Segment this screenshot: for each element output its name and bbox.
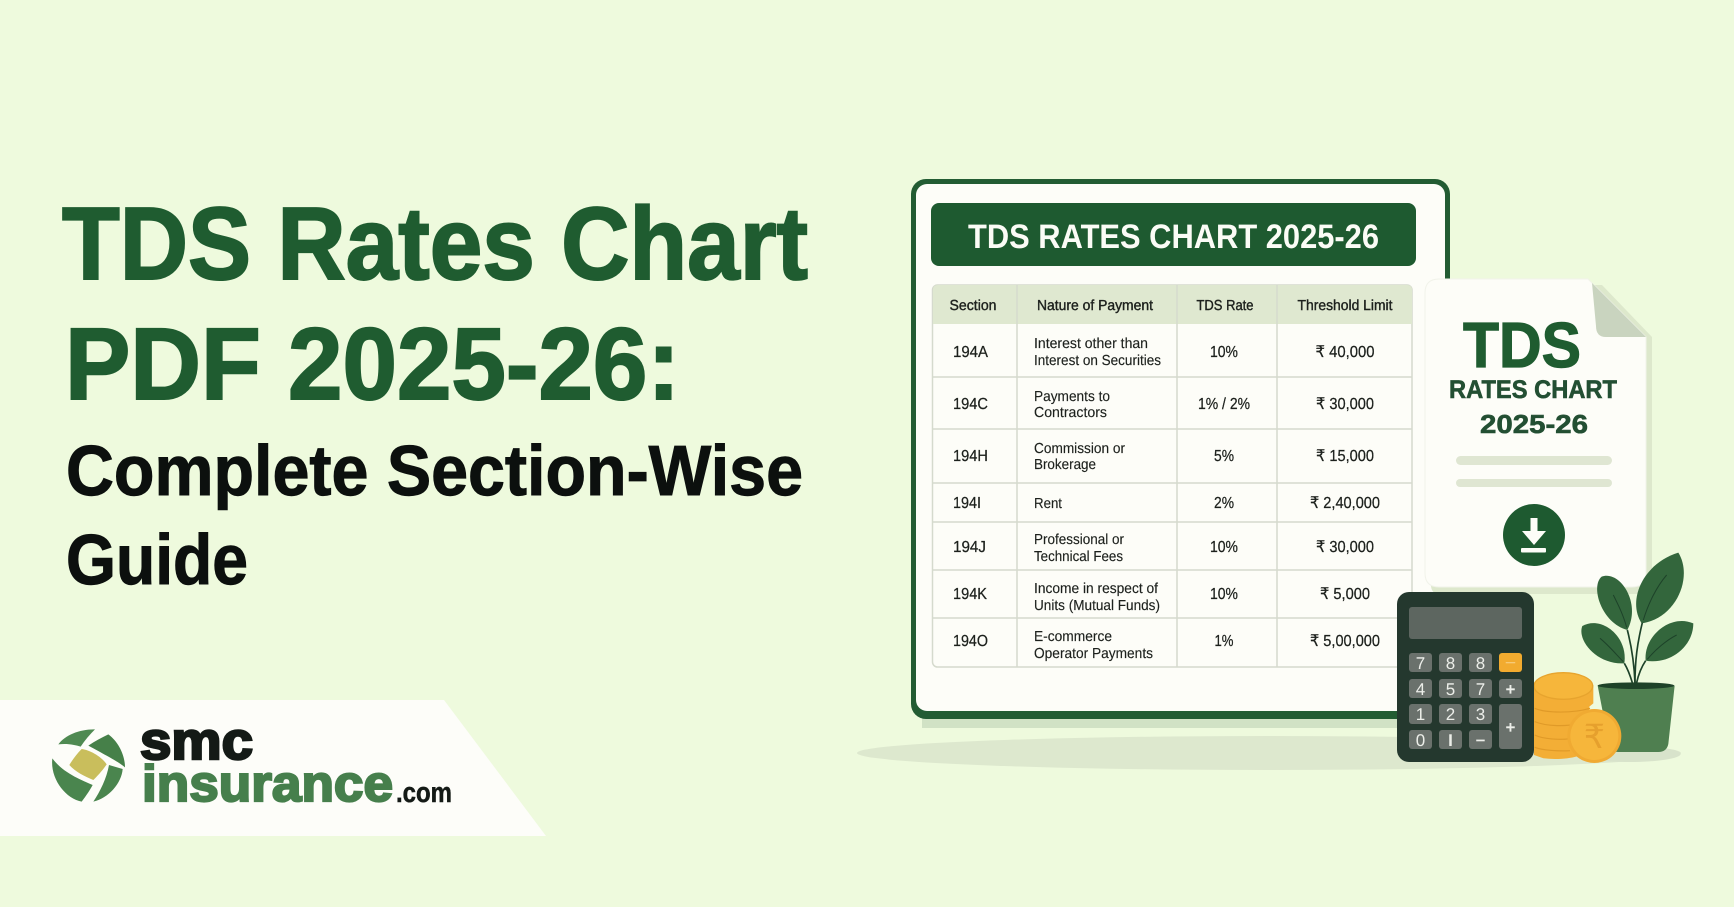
card title: TDS (1463, 309, 1581, 381)
table header: TDS Rate (1196, 298, 1254, 314)
title (62, 186, 808, 421)
row 194I (953, 495, 1380, 512)
wordmark: smc: smc (140, 712, 253, 771)
chart banner (931, 203, 1416, 266)
calculator keys: 8 (1476, 654, 1485, 673)
row 194A (953, 336, 1375, 369)
row 194H: Brokerage (1034, 457, 1096, 473)
row 194J (953, 532, 1374, 565)
row 194O: 1% (1214, 633, 1234, 650)
table header (950, 298, 1392, 314)
calculator keys: 2 (1446, 705, 1455, 724)
row 194K: 194K (953, 586, 987, 603)
chart banner: TDS RATES CHART 2025-26 (968, 218, 1379, 256)
row 194O: Operator Payments (1034, 646, 1153, 662)
row 194H: ₹ 15,000 (1316, 448, 1374, 465)
row 194O: ₹ 5,00,000 (1310, 633, 1380, 650)
row 194A: 10% (1210, 344, 1238, 361)
calculator keys: 8 (1446, 654, 1455, 673)
title: TDS Rates Chart (62, 186, 808, 301)
table header: Nature of Payment (1037, 298, 1153, 314)
panel: rates chart document (911, 179, 1450, 728)
placeholder lines (1456, 456, 1612, 487)
title: PDF 2025-26: (65, 307, 680, 421)
row 194H: 5% (1214, 448, 1234, 465)
wordmark: insurance: insurance (142, 755, 393, 812)
wordmark: .com: .com (396, 777, 452, 808)
row 194O: E-commerce (1034, 629, 1112, 645)
row 194J: 194J (953, 539, 986, 556)
icon: download (1503, 504, 1565, 566)
row 194A: Interest on Securities (1034, 353, 1161, 369)
row 194C: ₹ 30,000 (1316, 396, 1374, 413)
row 194J: Technical Fees (1034, 549, 1123, 565)
calculator keys: 5 (1446, 680, 1455, 699)
page fold (1592, 283, 1646, 337)
row 194C: 1% / 2% (1198, 396, 1250, 413)
row 194O: 194O (953, 633, 988, 650)
row 194H: 194H (953, 448, 988, 465)
card title: RATES CHART (1449, 376, 1617, 404)
row 194K: Income in respect of (1034, 581, 1159, 597)
row 194I: 194I (953, 495, 981, 512)
row 194A: 194A (953, 344, 988, 361)
table header: Threshold Limit (1298, 298, 1392, 314)
row 194K: 10% (1210, 586, 1238, 603)
row 194I: ₹ 2,40,000 (1310, 495, 1380, 512)
row 194K: Units (Mutual Funds) (1034, 598, 1160, 614)
rupee coin: ₹ (1584, 718, 1605, 755)
calculator keys: I (1448, 731, 1453, 750)
calculator keys: 7 (1416, 654, 1425, 673)
logo band (0, 700, 546, 836)
pot (1598, 682, 1675, 752)
row 194C (953, 389, 1374, 421)
row 194J: ₹ 30,000 (1316, 539, 1374, 556)
calculator keys: 4 (1416, 680, 1425, 699)
row 194J: 10% (1210, 539, 1238, 556)
row 194K: ₹ 5,000 (1320, 586, 1370, 603)
logo: smc insurance (52, 712, 452, 812)
calculator keys: 3 (1476, 705, 1485, 724)
row 194K (953, 581, 1370, 614)
icon: globe (52, 729, 125, 802)
row 194C: Payments to (1034, 389, 1110, 405)
calculator keys: + (1506, 718, 1516, 737)
subtitle (66, 432, 803, 600)
row 194A: ₹ 40,000 (1316, 344, 1375, 361)
calculator display (1409, 607, 1522, 639)
calculator keys: 0 (1416, 731, 1425, 750)
row 194A: Interest other than (1034, 336, 1148, 352)
subtitle: Complete Section-Wise (66, 432, 803, 511)
row 194C: Contractors (1034, 405, 1107, 421)
plant (1579, 553, 1693, 762)
rates table (932, 285, 1412, 667)
subtitle: Guide (66, 521, 248, 600)
plant shadow (1579, 746, 1681, 762)
row 194H (953, 441, 1374, 473)
card title (1449, 309, 1617, 439)
calculator (1397, 592, 1534, 762)
calculator keys: – (1506, 652, 1516, 671)
calculator keys (1409, 652, 1522, 750)
coins (1534, 673, 1621, 763)
table header: Section (950, 298, 996, 314)
leaves (1581, 553, 1693, 683)
card title: 2025-26 (1480, 409, 1588, 439)
row 194O (953, 629, 1380, 662)
row 194C: 194C (953, 396, 988, 413)
calculator keys: – (1476, 730, 1485, 749)
row 194J: Professional or (1034, 532, 1124, 548)
calculator keys: 1 (1416, 705, 1425, 724)
row 194I: 2% (1214, 495, 1234, 512)
ground shadow (857, 736, 1681, 770)
row 194I: Rent (1034, 496, 1062, 512)
calculator keys: + (1506, 680, 1516, 699)
calculator keys: 7 (1476, 680, 1485, 699)
panel: download document card (1425, 279, 1652, 594)
row 194H: Commission or (1034, 441, 1125, 457)
